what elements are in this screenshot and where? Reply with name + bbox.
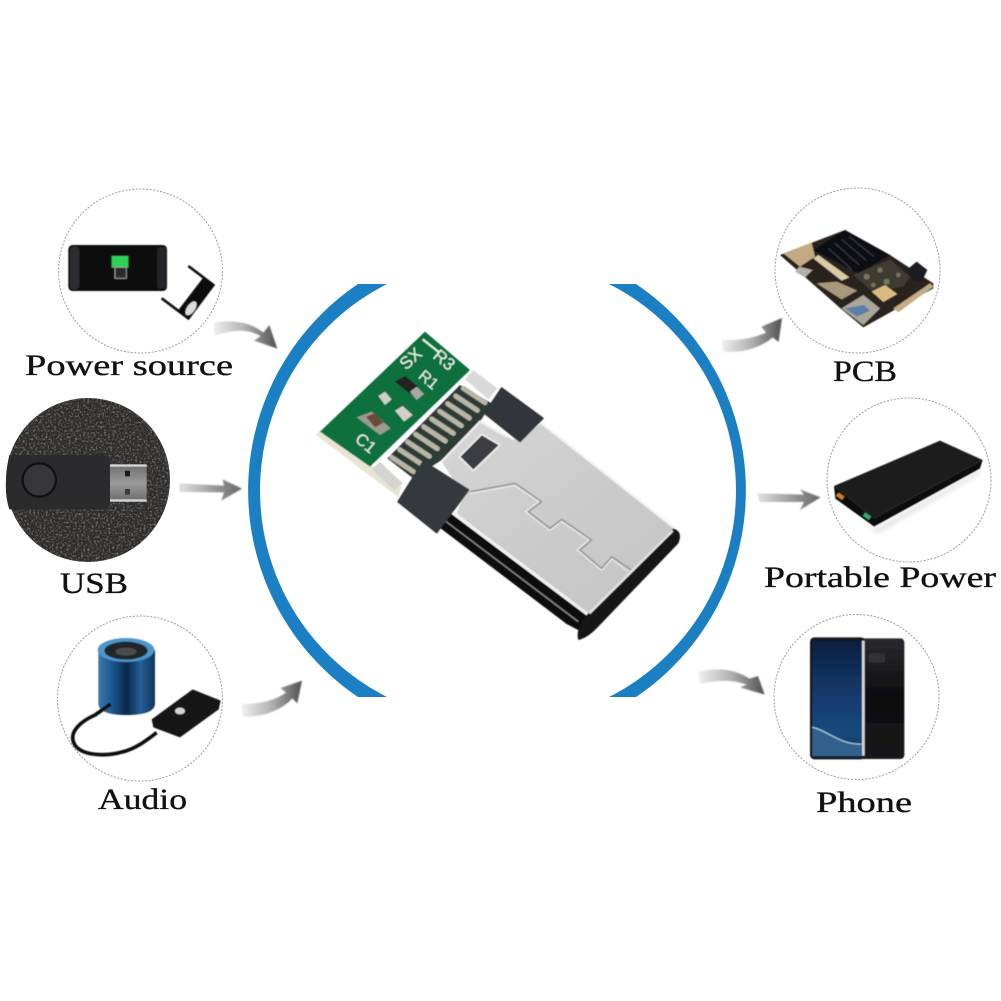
swivel knob [23, 463, 56, 497]
lower face chrome edge [449, 510, 587, 614]
square window [459, 434, 500, 471]
header block [907, 262, 927, 282]
dark lower shell side [439, 512, 587, 631]
bracket [162, 266, 213, 318]
phone left shading [70, 247, 79, 289]
label: PCB: PCB [833, 355, 897, 388]
panel: power source [58, 189, 222, 353]
solder pad bottom [372, 462, 403, 491]
arrow: connector to PCB [722, 318, 782, 352]
dashed circle: audio [58, 616, 222, 781]
arrow: USB to connector [179, 479, 242, 501]
label: USB: USB [60, 567, 128, 600]
front rim highlight [589, 531, 673, 613]
receiver button [175, 708, 185, 714]
right edge connector [893, 283, 933, 312]
green port [863, 512, 871, 520]
panel: phone [774, 614, 939, 780]
wallpaper wave [812, 727, 862, 756]
phone body [68, 245, 167, 291]
front opening [578, 528, 680, 640]
panel: portable power [827, 398, 991, 562]
receiver box [152, 689, 221, 737]
panel: audio [58, 616, 222, 781]
icon: smartphone front and back [810, 637, 904, 759]
label: Portable Power: Portable Power [764, 561, 996, 594]
black clip top [485, 388, 543, 441]
wave highlight [812, 727, 862, 744]
arrow: connector to phone [698, 669, 765, 695]
shadow [840, 470, 980, 533]
PCB labels: SX [395, 343, 426, 374]
SMD components [357, 376, 424, 435]
blue arc right [609, 284, 746, 697]
label: Phone: Phone [816, 786, 912, 819]
cable [73, 704, 157, 755]
component area [853, 259, 910, 293]
label: Audio: Audio [98, 783, 187, 816]
solder pad top [465, 370, 497, 399]
contact pins [392, 388, 485, 472]
arrow: connector to portable power [757, 489, 821, 510]
right bezel highlight [862, 641, 865, 756]
front phone frame [810, 637, 865, 759]
blue arc left [248, 284, 387, 697]
speaker center [115, 648, 137, 656]
battery body [115, 267, 126, 278]
plug edge top [110, 464, 147, 467]
power bank top [834, 441, 983, 518]
centre port [817, 282, 857, 299]
tan left connector [783, 243, 815, 267]
component speckle [864, 267, 901, 287]
flash drive body [6, 455, 110, 509]
PCB labels: R3 [429, 345, 459, 375]
chrome band [445, 521, 578, 622]
orange port [836, 492, 844, 500]
PCB labels: C1 [351, 429, 380, 457]
PCB labels [351, 339, 459, 457]
green PCB [320, 332, 470, 467]
blue port tongue [845, 305, 870, 317]
stepped seam line [470, 483, 632, 570]
black clip bottom [398, 462, 468, 532]
arrow: power source to connector [213, 321, 277, 349]
silver small port [795, 267, 813, 277]
USB plug [110, 465, 147, 502]
shield left highlight [442, 422, 507, 462]
metal shield top face [442, 422, 675, 615]
speaker cylinder [98, 650, 155, 715]
panel: PCB [775, 188, 940, 353]
shield highlight edge [542, 423, 675, 528]
camera [868, 653, 885, 663]
plug edge bottom [110, 499, 147, 502]
screen [812, 641, 862, 757]
phone right shading [157, 247, 166, 289]
plug hole bottom [125, 489, 130, 495]
arrow: audio to connector [242, 681, 302, 717]
icon: charging phone and bracket [68, 245, 213, 318]
icon: circuit board [780, 230, 933, 327]
dark textured disc [6, 398, 170, 562]
power bank side faces [834, 460, 983, 527]
ribbon slot [813, 255, 849, 281]
dashed circle: power source [58, 189, 222, 353]
gold chip [872, 285, 897, 302]
dashed circle: portable power [827, 398, 991, 562]
seam highlight [470, 486, 628, 572]
disc grain [6, 398, 170, 562]
central product: USB-C connector on PCB [316, 332, 680, 640]
icon: speaker and receiver [73, 638, 221, 755]
dashed circle: phone [774, 614, 939, 780]
speaker rim [98, 638, 154, 662]
heatsink [813, 230, 890, 273]
plug hole top [125, 471, 130, 476]
heatsink fins [828, 237, 874, 269]
speaker cone [104, 642, 148, 660]
label: Power source: Power source [25, 349, 233, 382]
USB 3 port [842, 295, 880, 325]
back of phone [858, 638, 904, 759]
board [780, 230, 933, 327]
icon: power bank [834, 441, 983, 533]
PCB substrate edge [316, 429, 402, 497]
dark backing behind pins [387, 385, 492, 478]
PCB labels: R1 [415, 367, 441, 394]
panel: USB [6, 398, 170, 562]
dashed circle: PCB [775, 188, 940, 353]
battery green charge [112, 256, 128, 268]
